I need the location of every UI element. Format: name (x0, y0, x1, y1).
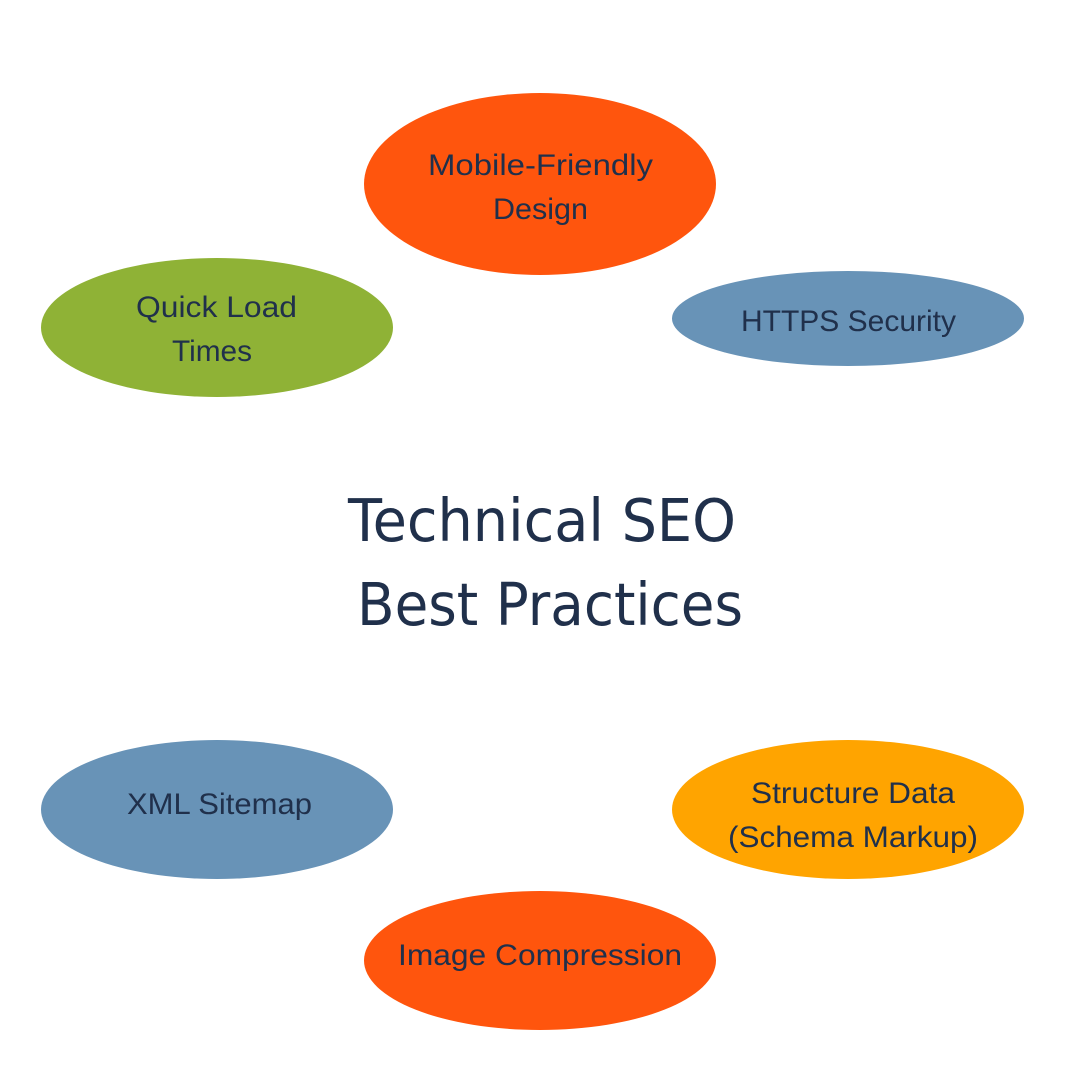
node: Structure Data (Schema Markup) (672, 740, 1024, 879)
title (347, 486, 743, 639)
node: HTTPS Security (672, 271, 1024, 366)
title: Technical SEO (347, 486, 736, 555)
node: Quick Load Times: Times (172, 335, 252, 368)
node: Mobile-Friendly Design: Mobile-Friendly (428, 149, 653, 182)
node: Image Compression (364, 891, 716, 1030)
node: Structure Data (Schema Markup): Structure Data (751, 777, 955, 810)
title: Best Practices (357, 570, 743, 639)
node: Quick Load Times: Quick Load (136, 291, 297, 324)
node: HTTPS Security: HTTPS Security (741, 305, 956, 338)
node: Quick Load Times (41, 258, 393, 397)
node: XML Sitemap: XML Sitemap (127, 788, 312, 821)
node: Image Compression: Image Compression (398, 939, 682, 972)
node: Structure Data (Schema Markup): (Schema Markup) (728, 821, 978, 854)
node: XML Sitemap (41, 740, 393, 879)
node: Mobile-Friendly Design: Design (493, 193, 588, 226)
node: Mobile-Friendly Design (364, 93, 716, 275)
